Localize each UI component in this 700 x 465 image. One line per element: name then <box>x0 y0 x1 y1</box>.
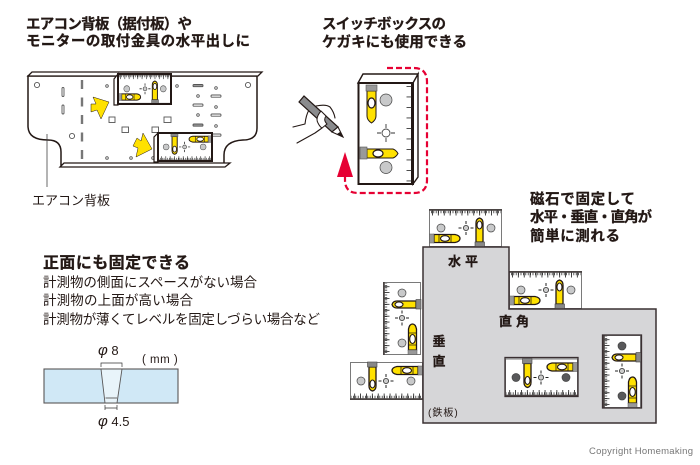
dimension: 8: φ 8 <box>98 342 119 359</box>
text block: conditions: 計測物の上面が高い場合 <box>43 292 194 308</box>
label: right angle: 直角 <box>499 314 529 329</box>
label: iron plate: (鉄板) <box>428 406 459 419</box>
text block: conditions: 計測物が薄くてレベルを固定しづらい場合など <box>43 312 320 327</box>
horizontal vial <box>360 147 398 159</box>
unit: ( mm ) <box>142 354 178 366</box>
heading: air conditioner back plate <box>26 15 250 50</box>
box top and side <box>358 74 418 184</box>
plate holes <box>34 82 251 159</box>
heading: magnets <box>530 191 652 245</box>
label: vertical: 垂 <box>432 334 446 349</box>
illustration: hand holding pen <box>293 96 343 143</box>
label: back plate: エアコン背板 <box>32 193 110 208</box>
text block: conditions <box>43 275 320 327</box>
top flange <box>28 72 262 76</box>
diagram: hole cross-section <box>44 342 178 430</box>
label: vertical <box>432 334 446 369</box>
illustration: level on plate, center <box>505 358 578 396</box>
ruler ticks <box>406 86 412 182</box>
heading: air conditioner back plate: エアコン背板（据付板）や <box>26 15 192 33</box>
pen <box>299 96 343 137</box>
side shade <box>411 84 413 183</box>
lower mounted level <box>154 133 212 162</box>
plate outline <box>28 76 257 165</box>
heading: magnets: 磁石で固定して <box>530 191 635 208</box>
dashed slot line <box>81 80 83 162</box>
heading: switch box marking: スイッチボックスの <box>322 16 446 33</box>
center mark <box>377 124 395 142</box>
arrow: lower yellow <box>133 133 152 157</box>
copyright: Copyright Homemaking <box>589 446 693 457</box>
heading: switch box marking: ケガキにも使用できる <box>322 33 467 51</box>
bottom dimension bar <box>105 405 117 410</box>
illustration: level on plate, right <box>602 335 642 408</box>
text block: conditions: 計測物の側面にスペースがない場合 <box>43 275 258 290</box>
illustration: level on switch box <box>337 68 427 193</box>
vertical vial <box>366 85 377 123</box>
red dashed arrow path <box>345 68 427 193</box>
dimension: 4.5: φ 4.5 <box>98 413 129 430</box>
hand back outline <box>293 105 335 143</box>
finger gripping pen <box>317 111 327 128</box>
heading: magnets: 簡単に測れる <box>530 227 620 245</box>
box front <box>358 83 413 184</box>
upper mounted level <box>114 74 171 105</box>
heading: switch box marking <box>322 16 467 51</box>
heading: magnets: 水平・垂直・直角が <box>530 208 652 226</box>
red arrow head <box>337 152 353 177</box>
iron plate <box>423 247 656 423</box>
illustration: level placed on left edge <box>383 282 421 355</box>
label: horizontal: 水平 <box>448 254 478 269</box>
illustration: level placed at lower left edge <box>350 362 423 400</box>
blue block <box>44 369 178 403</box>
arrow: upper yellow <box>91 97 109 119</box>
leader line: back plate label <box>46 134 48 187</box>
top dimension bar <box>101 363 122 367</box>
bottom flange <box>60 163 230 167</box>
gray circles <box>380 94 392 174</box>
illustration: level placed on top edge <box>429 209 502 247</box>
diagram: air conditioner back plate <box>28 72 262 167</box>
illustration: level placed in upper corner <box>509 271 582 309</box>
hole step <box>106 397 117 399</box>
tapered hole <box>101 369 122 403</box>
heading: air conditioner back plate: モニターの取付金具の水平出しに <box>26 32 250 50</box>
label: vertical: 直 <box>432 354 446 369</box>
heading: front mounting: 正面にも固定できる <box>43 254 190 272</box>
